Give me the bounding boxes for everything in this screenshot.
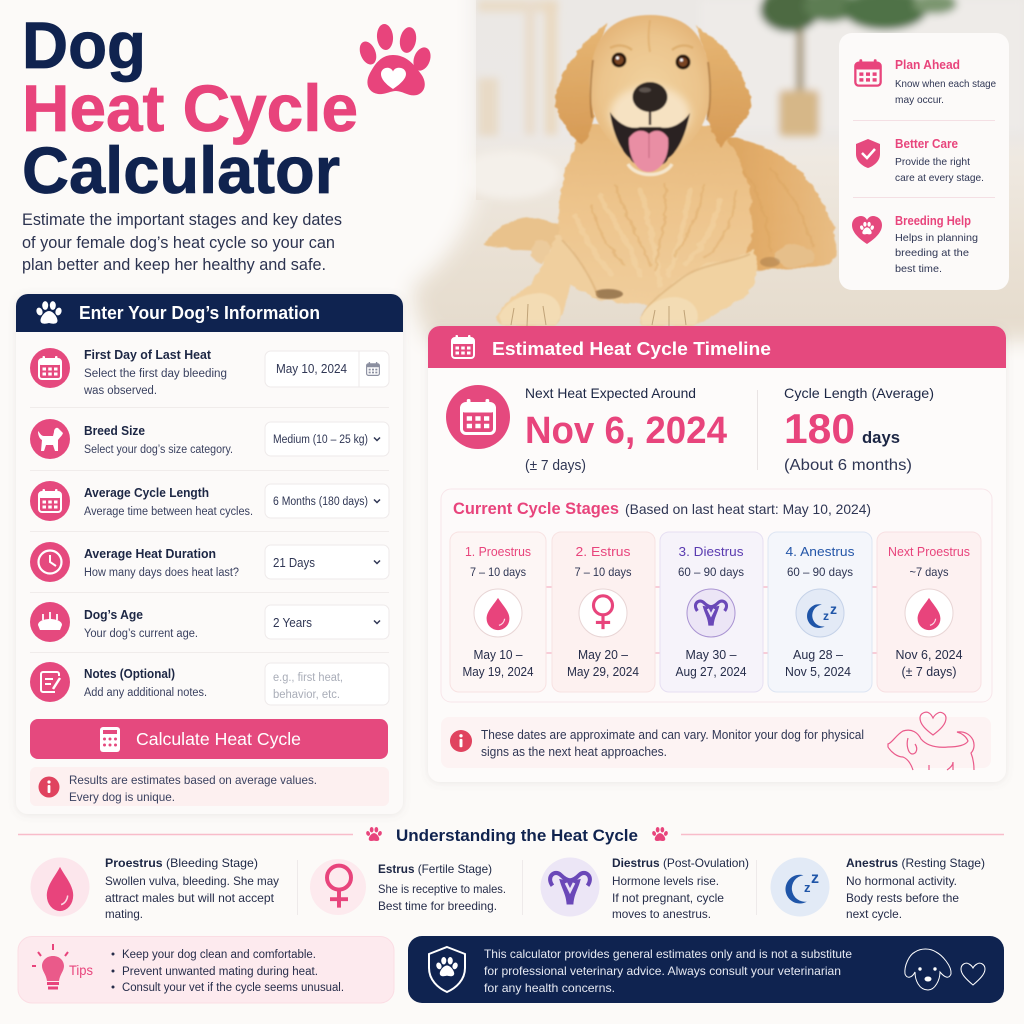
row: notes xyxy=(30,662,389,705)
row: average cycle length: Average time between heat cycles. xyxy=(84,506,253,518)
explainer: proestrus: Proestrus (Bleeding Stage) xyxy=(105,856,258,870)
note: estimates: Every dog is unique. xyxy=(69,790,175,804)
icon: dog outline with heart xyxy=(888,712,974,770)
benefit: breeding help xyxy=(852,214,978,275)
benefit: better care: Provide the right xyxy=(895,156,970,168)
benefit: breeding help: breeding at the xyxy=(895,247,969,259)
panel: benefits card xyxy=(839,33,1009,290)
row: average heat duration: How many days does heat last? xyxy=(84,567,239,579)
explainer: diestrus: moves to anestrus. xyxy=(612,907,711,921)
head xyxy=(589,15,711,174)
benefit: breeding help: Helps in planning xyxy=(895,232,978,244)
stage card: anestrus: 4. Anestrus xyxy=(786,544,855,559)
section heading: understanding the heat cycle xyxy=(18,827,1004,845)
intro text: plan better and keep her healthy and safe. xyxy=(22,256,326,274)
benefit: better care: care at every stage. xyxy=(895,172,984,184)
icon: pink paw with heart xyxy=(357,23,434,95)
explainer: anestrus: Body rests before the xyxy=(846,891,959,905)
stage card: proestrus xyxy=(450,532,546,692)
stage card: proestrus: May 10 – xyxy=(474,648,523,662)
explainer: anestrus: z xyxy=(804,880,811,895)
stage card: estrus: May 29, 2024 xyxy=(567,665,639,679)
calculate button xyxy=(30,719,388,759)
explainer: diestrus: If not pregnant, cycle xyxy=(612,891,724,905)
row: average heat duration: Average Heat Duration xyxy=(84,547,216,561)
section heading: understanding the heat cycle: Understanding the Heat Cycle xyxy=(396,827,638,845)
row: notes: Notes (Optional) xyxy=(84,667,175,681)
explainer: anestrus xyxy=(770,856,985,921)
tips list: Consult your vet if the cycle seems unusual. xyxy=(122,982,344,994)
note: estimates: Results are estimates based on average values. xyxy=(69,773,317,787)
disclaimer text: for any health concerns. xyxy=(484,981,615,995)
stage card: diestrus: 3. Diestrus xyxy=(678,544,744,559)
benefit: breeding help: best time. xyxy=(895,263,942,275)
stage card: diestrus xyxy=(660,532,763,692)
cycle length: Cycle Length (Average) xyxy=(784,385,934,401)
stage card: estrus: 7 – 10 days xyxy=(574,565,632,579)
front legs xyxy=(497,235,757,326)
panel header: Enter Your Dog’s Information xyxy=(79,303,320,323)
stage card: proestrus: 1. Proestrus xyxy=(465,544,531,559)
row: first day of last heat: May 10, 2024 xyxy=(276,362,347,376)
stage card: estrus xyxy=(552,532,655,692)
row: dog's age xyxy=(30,602,389,642)
stage card: next proestrus: (± 7 days) xyxy=(902,665,956,679)
row: dog's age: 2 Years xyxy=(273,616,312,630)
note: dates approximate xyxy=(441,717,991,768)
next heat date xyxy=(525,385,727,474)
calculate button: Calculate Heat Cycle xyxy=(136,729,301,749)
row: first day of last heat xyxy=(30,348,389,397)
tail and hind body xyxy=(483,125,836,305)
explainer: anestrus: No hormonal activity. xyxy=(846,874,957,888)
benefit: plan ahead: may occur. xyxy=(895,94,944,106)
explainer: diestrus: Hormone levels rise. xyxy=(612,874,719,888)
row: breed size xyxy=(30,419,389,459)
cycle length: (About 6 months) xyxy=(784,457,912,474)
disclaimer text: for professional veterinary advice. Always consult your veterinarian xyxy=(484,964,841,978)
explainer: estrus: Estrus (Fertile Stage) xyxy=(378,862,492,876)
row: first day of last heat: Select the first day bleeding xyxy=(84,368,227,380)
stage card: diestrus: 60 – 90 days xyxy=(678,565,744,579)
explainer: anestrus: z xyxy=(811,870,819,887)
panel: estimated heat cycle timeline xyxy=(428,326,1006,782)
icon: shield paw xyxy=(429,947,465,992)
benefit: better care xyxy=(856,137,984,184)
stage card: proestrus: 7 – 10 days xyxy=(470,565,526,579)
row: average cycle length xyxy=(30,481,389,521)
panel: tips: Tips xyxy=(69,962,93,978)
dog xyxy=(483,15,836,326)
explainer: anestrus: Anestrus (Resting Stage) xyxy=(846,856,985,870)
stages heading: (Based on last heat start: May 10, 2024) xyxy=(625,501,871,517)
explainer: proestrus xyxy=(30,856,279,921)
next heat date: Nov 6, 2024 xyxy=(525,410,727,452)
explainer: proestrus: Swollen vulva, bleeding. She may xyxy=(105,874,279,888)
next heat date: Next Heat Expected Around xyxy=(525,385,696,401)
disclaimer text: This calculator provides general estimates only and is not a substitute xyxy=(484,947,852,961)
benefit: better care: Better Care xyxy=(895,137,958,151)
stages heading: Current Cycle Stages xyxy=(453,499,619,518)
stage card: next proestrus xyxy=(877,532,981,692)
timeline header xyxy=(428,326,1006,368)
title xyxy=(22,8,358,207)
row: average heat duration: 21 Days xyxy=(273,556,315,570)
explainer: estrus: Best time for breeding. xyxy=(378,899,497,913)
title: Heat Cycle xyxy=(22,71,358,145)
stages heading xyxy=(453,499,871,518)
stage card: next proestrus: Next Proestrus xyxy=(888,544,970,559)
tips list xyxy=(112,949,344,994)
note: dates approximate: signs as the next heat approaches. xyxy=(481,745,667,759)
chest fur xyxy=(573,183,814,276)
stage card: anestrus: z xyxy=(823,609,829,623)
tips list: Keep your dog clean and comfortable. xyxy=(122,949,316,961)
row: breed size: Select your dog’s size category. xyxy=(84,444,233,456)
note: estimates xyxy=(30,767,389,806)
stage card: diestrus: Aug 27, 2024 xyxy=(676,665,747,679)
panel: disclaimer xyxy=(408,936,1004,1003)
stage card: anestrus: Nov 5, 2024 xyxy=(785,665,851,679)
panel: tips xyxy=(18,936,394,1003)
cycle length: 180 xyxy=(784,405,855,452)
row: average heat duration xyxy=(30,542,389,582)
intro text: of your female dog’s heat cycle so your can xyxy=(22,234,335,252)
cycle length: days xyxy=(862,428,900,447)
timeline header: Estimated Heat Cycle Timeline xyxy=(492,338,771,359)
ears xyxy=(555,24,752,148)
disclaimer text xyxy=(484,947,852,995)
stage card: diestrus: May 30 – xyxy=(686,648,737,662)
stage card: next proestrus: Nov 6, 2024 xyxy=(896,648,963,662)
explainer: proestrus: mating. xyxy=(105,907,143,921)
intro text: Estimate the important stages and key dates xyxy=(22,211,342,229)
tips list: Prevent unwanted mating during heat. xyxy=(122,966,318,978)
explainer: proestrus: attract males but will not accept xyxy=(105,891,275,905)
intro text xyxy=(22,211,342,274)
stage card: estrus: 2. Estrus xyxy=(576,544,631,559)
icon: large calendar xyxy=(446,385,510,449)
row: breed size: Breed Size xyxy=(84,424,145,438)
stage card: anestrus: z xyxy=(830,601,837,617)
panel: enter your dog's information xyxy=(16,294,403,814)
row: notes: behavior, etc. xyxy=(273,689,340,701)
row: dog's age: Your dog’s current age. xyxy=(84,628,198,640)
row: dog's age: Dog’s Age xyxy=(84,608,143,622)
row: notes: e.g., first heat, xyxy=(273,672,343,684)
stage card: next proestrus: ~7 days xyxy=(910,565,948,579)
panel header xyxy=(16,294,403,332)
row: average cycle length: 6 Months (180 days) xyxy=(273,496,368,508)
stage card: anestrus xyxy=(768,532,872,692)
row: breed size: Medium (10 – 25 kg) xyxy=(273,434,368,446)
stage card: anestrus: 60 – 90 days xyxy=(787,565,853,579)
icon: dog face and heart xyxy=(905,949,985,990)
explainer: diestrus xyxy=(540,856,749,921)
row: notes: Add any additional notes. xyxy=(84,687,207,699)
benefit: plan ahead: Know when each stage xyxy=(895,78,996,90)
icon: lightbulb xyxy=(32,944,68,990)
explainer: anestrus: next cycle. xyxy=(846,907,902,921)
title: Dog xyxy=(22,8,146,82)
panel: current cycle stages xyxy=(441,489,992,702)
explainer: estrus xyxy=(310,859,506,915)
stage card: anestrus: Aug 28 – xyxy=(793,648,843,662)
cycle length xyxy=(784,385,934,474)
explainer: estrus: She is receptive to males. xyxy=(378,882,506,896)
stage card: estrus: May 20 – xyxy=(578,648,628,662)
explainer: diestrus: Diestrus (Post-Ovulation) xyxy=(612,856,749,870)
row: average cycle length: Average Cycle Length xyxy=(84,486,209,500)
benefit: plan ahead: Plan Ahead xyxy=(895,58,960,72)
next heat date: (± 7 days) xyxy=(525,458,586,474)
note: dates approximate: These dates are approximate and can vary. Monitor your dog for physical xyxy=(481,728,864,742)
hero photo: golden retriever on carpet xyxy=(380,0,1024,360)
title: Calculator xyxy=(22,133,340,207)
row: first day of last heat: was observed. xyxy=(83,385,157,397)
stage card: proestrus: May 19, 2024 xyxy=(462,665,534,679)
row: first day of last heat: First Day of Last Heat xyxy=(84,348,212,362)
benefit: plan ahead xyxy=(855,58,996,106)
benefit: breeding help: Breeding Help xyxy=(895,214,971,228)
